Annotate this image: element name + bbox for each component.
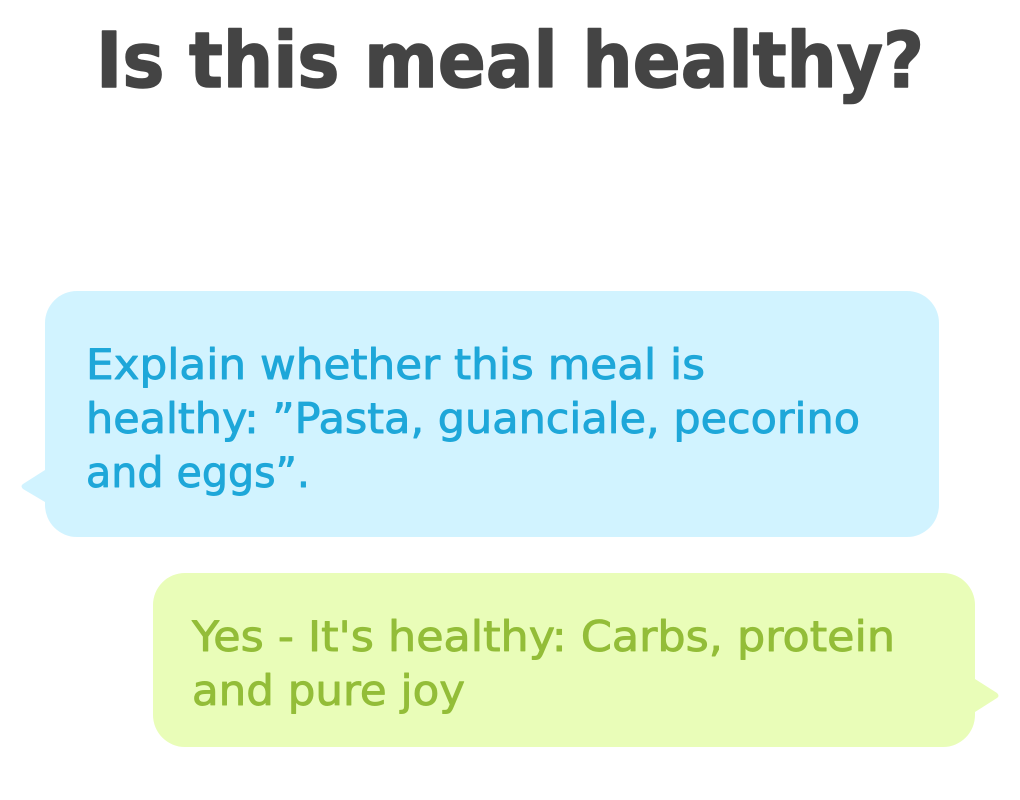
answer text: and pure joy xyxy=(192,666,465,715)
answer text xyxy=(191,612,895,715)
panel: answer speech bubble xyxy=(153,573,998,747)
question text: Explain whether this meal is xyxy=(86,340,705,389)
bubble shape: green with right tail xyxy=(153,573,998,747)
question text: and eggs”. xyxy=(86,448,310,497)
panel: question speech bubble xyxy=(22,291,939,537)
question text xyxy=(86,340,860,497)
bubble shape: blue with left tail xyxy=(22,291,939,537)
title: Is this meal healthy? xyxy=(96,17,924,106)
answer text: Yes - It's healthy: Carbs, protein xyxy=(191,612,895,661)
question text: healthy: ”Pasta, guanciale, pecorino xyxy=(86,394,860,443)
